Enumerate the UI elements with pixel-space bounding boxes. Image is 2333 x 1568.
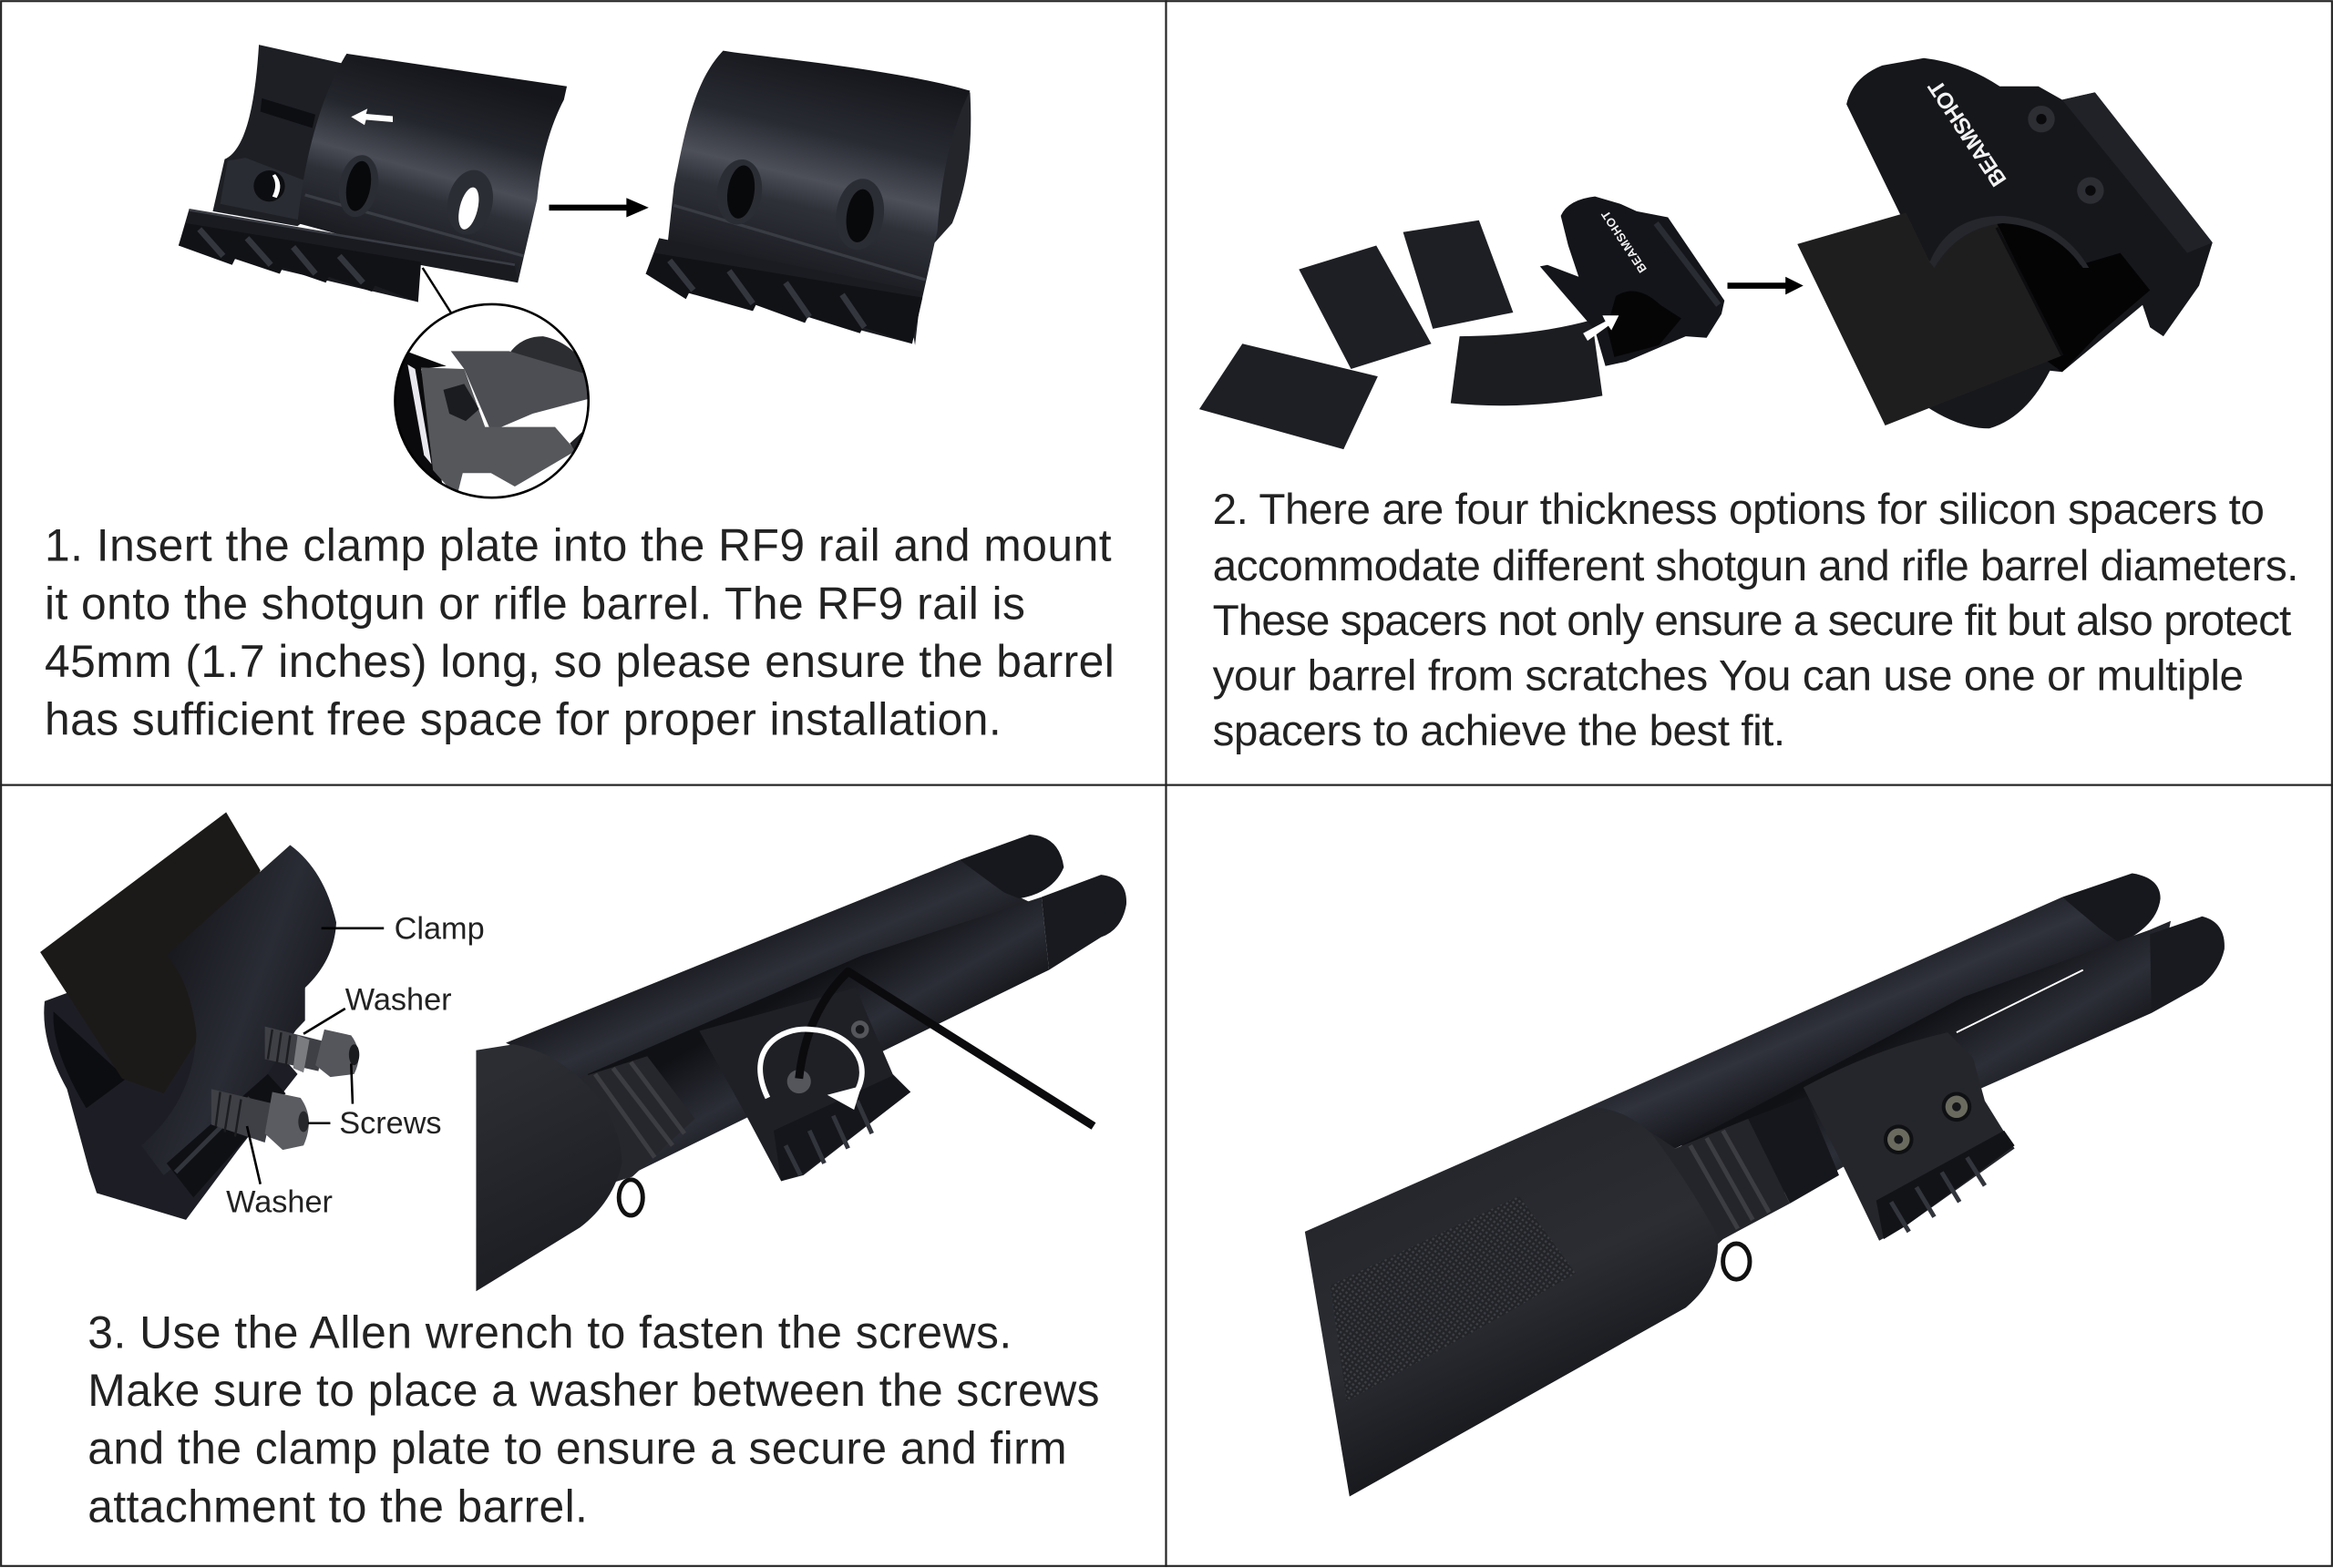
icon: Allen wrench: [799, 971, 1094, 1126]
photo: shotgun with clamp installed: [1305, 873, 2225, 1497]
icon: lower screw: [211, 1089, 309, 1150]
text: step 3: 3. Use the Allen wrench to fasten the screws.: [87, 1307, 1012, 1358]
text: step 1: it onto the shotgun or rifle barrel. The RF9 rail is: [45, 578, 1025, 629]
photo: clamp with plate inserted: [179, 45, 567, 302]
photo: clamp parts exploded: [40, 813, 359, 1220]
panel: step 3: [1, 785, 1166, 1566]
icon: upper screw: [265, 1027, 359, 1077]
icon: white arrow: [351, 108, 393, 125]
text: step 2: accommodate different shotgun and rifle barrel diameters.: [1213, 542, 2298, 590]
photo: small clamp with white arrow: [1540, 197, 1724, 366]
arrow: to assembled clamp: [549, 198, 649, 217]
text: step 2: 2. There are four thickness options for silicon spacers to: [1213, 486, 2265, 534]
text: step 3: attachment to the barrel.: [87, 1481, 588, 1532]
photo: four silicon spacers: [1199, 220, 1602, 449]
leader lines: [247, 928, 384, 1184]
text: step 3: and the clamp plate to ensure a secure and firm: [87, 1423, 1067, 1474]
photo: shotgun with Allen wrench: [476, 835, 1126, 1291]
text: step 3: [87, 1307, 1100, 1532]
text: step 1: [45, 520, 1115, 745]
photo: assembled clamp: [646, 51, 971, 345]
logo text large: BEAMSHOT: [1924, 76, 2011, 190]
text: step 1: has sufficient free space for proper installation.: [45, 694, 1002, 745]
arrow: to fitted spacer: [1728, 277, 1804, 294]
label: washer upper: Washer: [345, 983, 452, 1018]
panel: step 2: [1166, 1, 2332, 785]
panel: final result: [1166, 785, 2332, 1566]
label: screws: Screws: [339, 1106, 442, 1141]
panel: step 1: [1, 1, 1166, 785]
checkered grip texture: [1331, 1196, 1576, 1401]
text: step 1: 1. Insert the clamp plate into the RF9 rail and mount: [45, 520, 1112, 571]
label: washer lower: Washer: [226, 1185, 333, 1220]
label: clamp: Clamp: [395, 911, 485, 946]
clamp and rail: [1804, 1032, 2015, 1241]
icon: white arrow spacer: [1583, 315, 1619, 341]
text: step 2: These spacers not only ensure a secure fit but also protect: [1213, 597, 2291, 645]
photo: large clamp with spacer: [1797, 58, 2213, 428]
text: step 3: Make sure to place a washer between the screws: [87, 1365, 1100, 1416]
text: step 2: spacers to achieve the best fit.: [1213, 707, 1785, 755]
detail inset circle: [390, 304, 590, 506]
text: step 2: [1213, 486, 2298, 755]
logo text small: BEAMSHOT: [1598, 209, 1650, 275]
icon: white rotation arrow: [760, 1030, 862, 1110]
text: step 2: your barrel from scratches You can use one or multiple: [1213, 652, 2244, 701]
leader line to detail: [423, 268, 451, 313]
text: step 1: 45mm (1.7 inches) long, so please ensure the barrel: [45, 636, 1115, 687]
